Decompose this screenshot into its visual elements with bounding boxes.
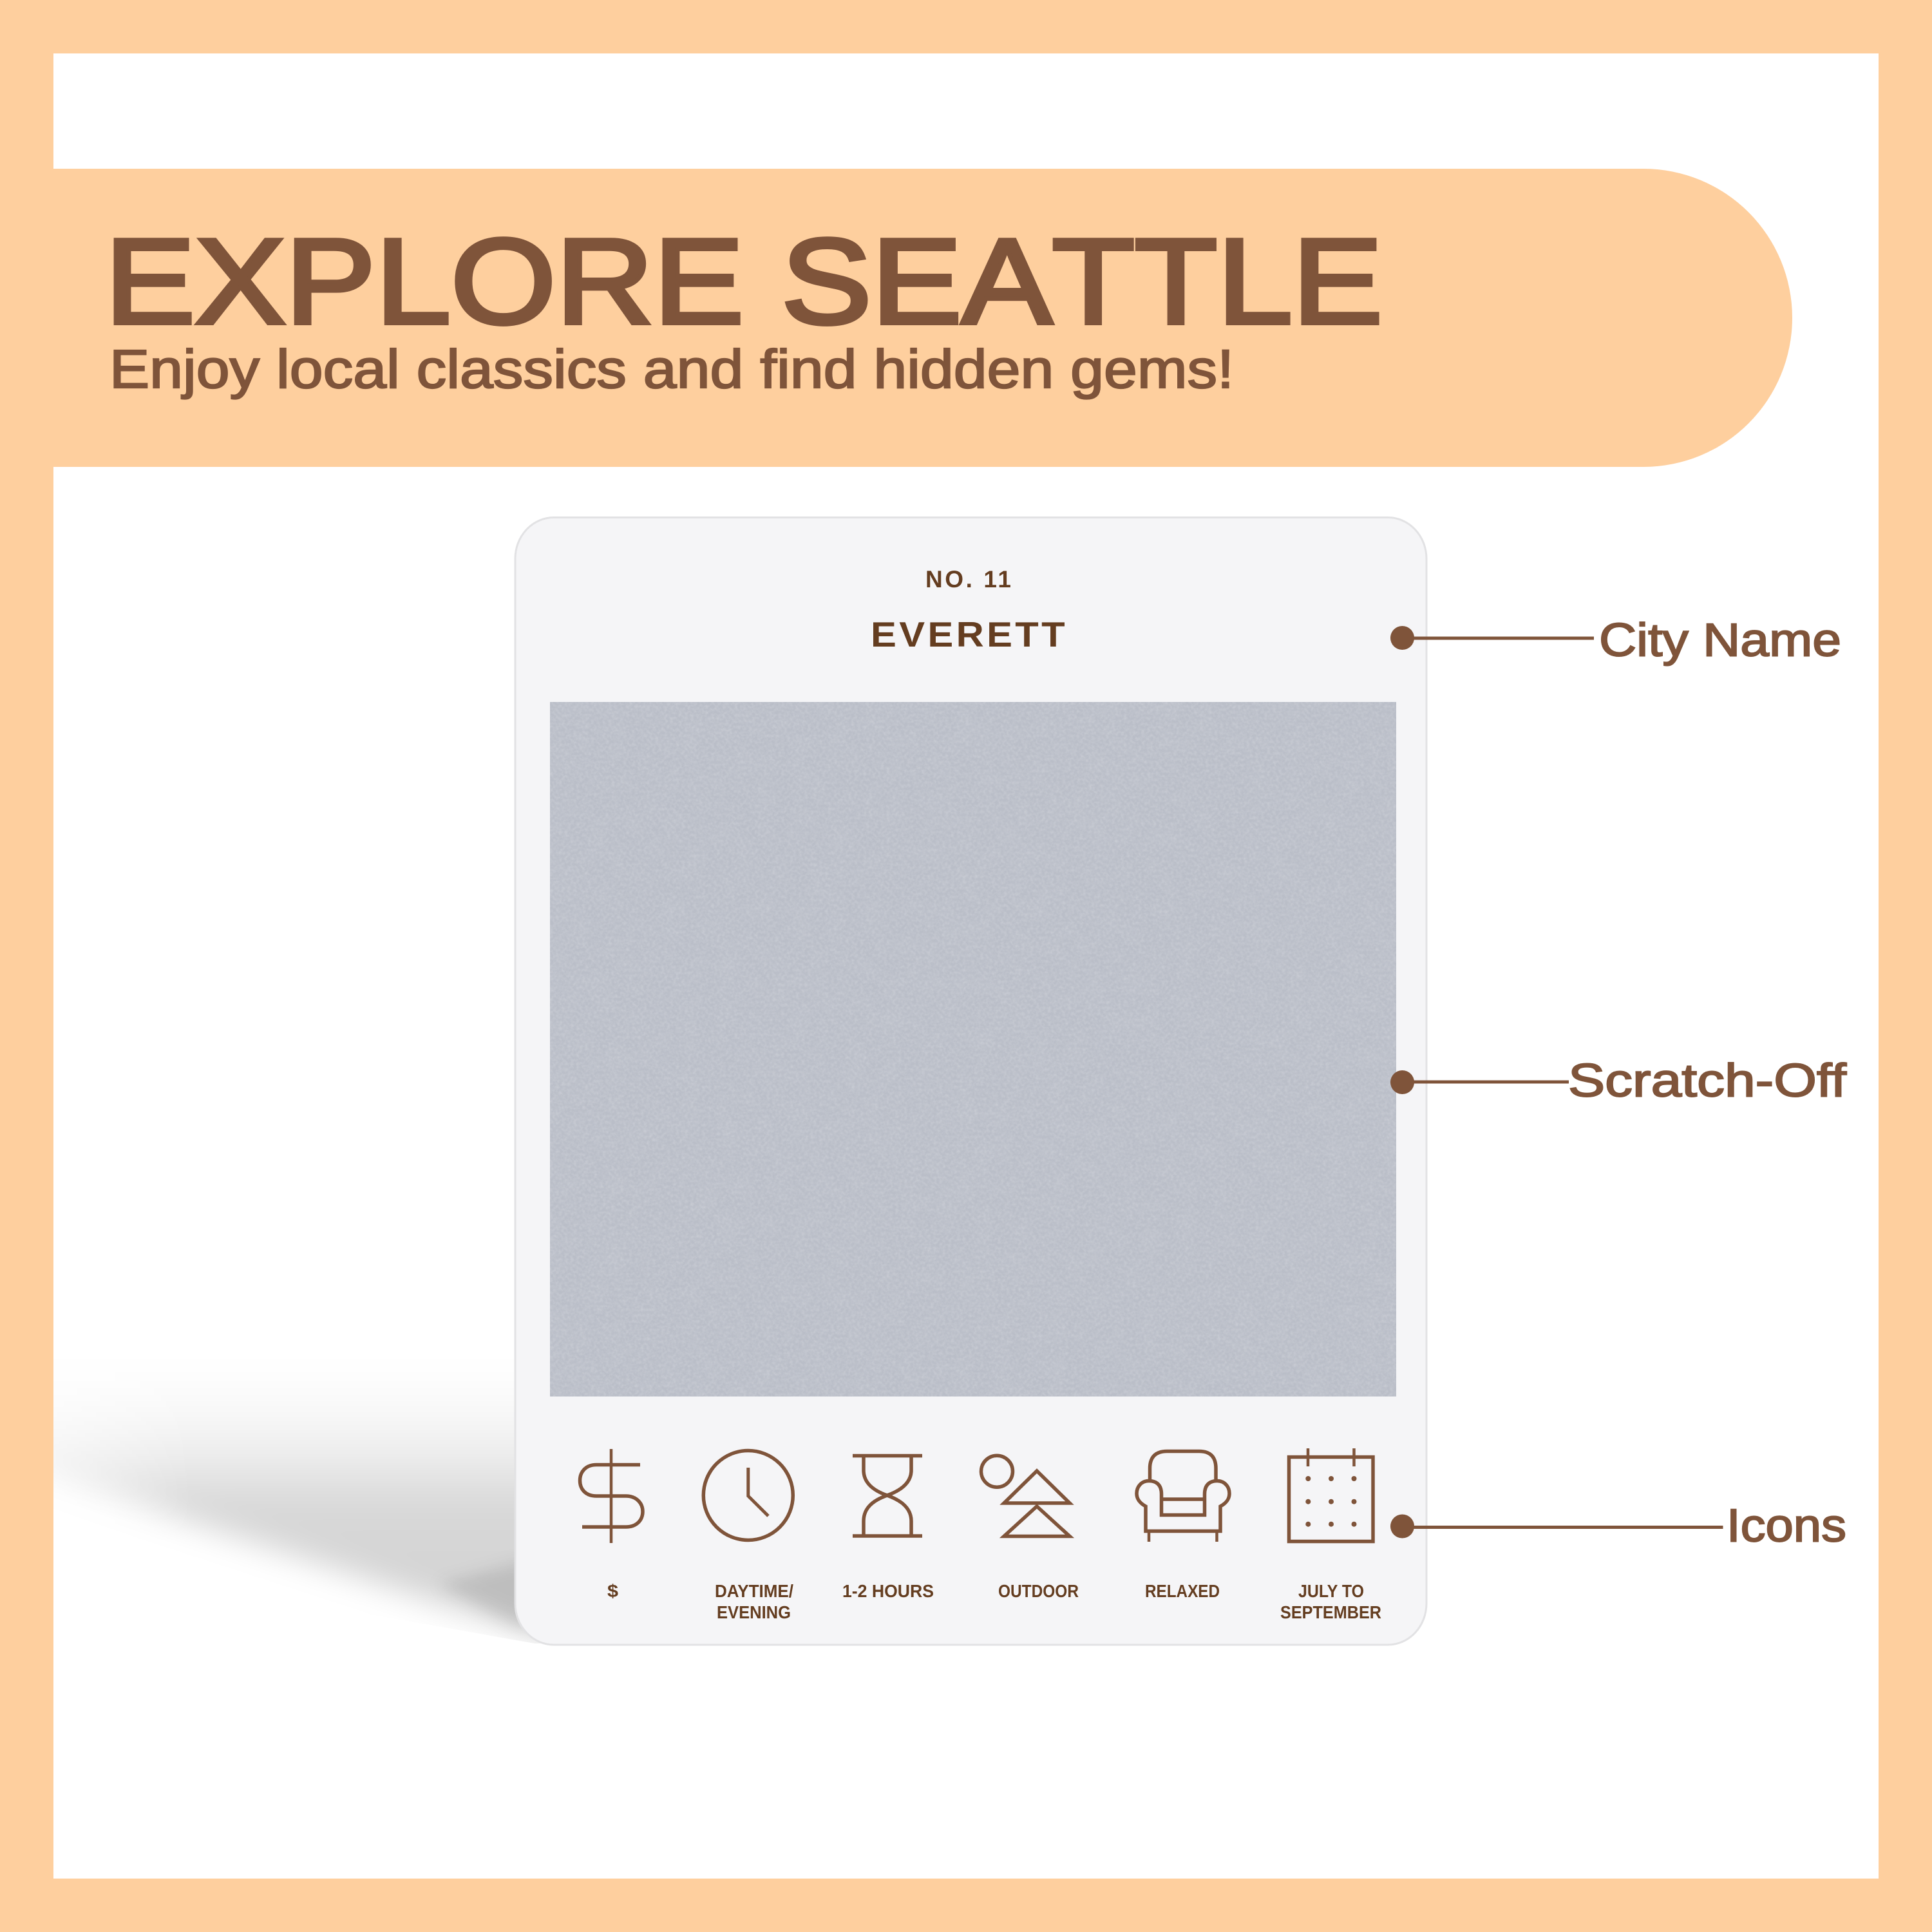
- subtitle: Enjoy local classics and find hidden gems!: [109, 339, 1234, 399]
- icon: hourglass: [853, 1455, 922, 1536]
- callout: icons: Icons: [1727, 1501, 1846, 1552]
- callout: icons: [1390, 1501, 1846, 1552]
- icon: dollar sign: [580, 1449, 643, 1543]
- card number: NO. 11: [925, 566, 1011, 592]
- label: time of day: EVENING: [717, 1602, 791, 1622]
- card body: [515, 518, 1426, 1645]
- banner: [53, 169, 1792, 467]
- label: time of day: [715, 1581, 793, 1622]
- panel: scratch card: [515, 518, 1426, 1645]
- callout: scratch-off: Scratch-Off: [1568, 1055, 1847, 1106]
- label: season: SEPTEMBER: [1280, 1602, 1381, 1622]
- label: setting: OUTDOOR: [998, 1581, 1079, 1601]
- label: season: [1280, 1581, 1381, 1622]
- label: duration: 1-2 HOURS: [842, 1581, 934, 1601]
- label: mood: RELAXED: [1145, 1581, 1220, 1601]
- card cast shadow: [53, 1417, 541, 1643]
- icon: calendar: [1289, 1448, 1373, 1542]
- title: EXPLORE SEATTLE: [105, 214, 1383, 349]
- callout: city name: [1390, 614, 1841, 666]
- scratch-off area: [550, 702, 1396, 1396]
- label: season: JULY TO: [1298, 1581, 1364, 1601]
- callout: scratch-off: [1390, 1055, 1847, 1106]
- city name: EVERETT: [871, 614, 1068, 654]
- callout: city name: City Name: [1599, 614, 1841, 666]
- label: time of day: DAYTIME/: [715, 1581, 793, 1601]
- icon: outdoor shapes: [981, 1455, 1070, 1537]
- label: price: $: [607, 1581, 618, 1601]
- icon: armchair: [1137, 1452, 1229, 1542]
- icon: clock: [703, 1450, 793, 1540]
